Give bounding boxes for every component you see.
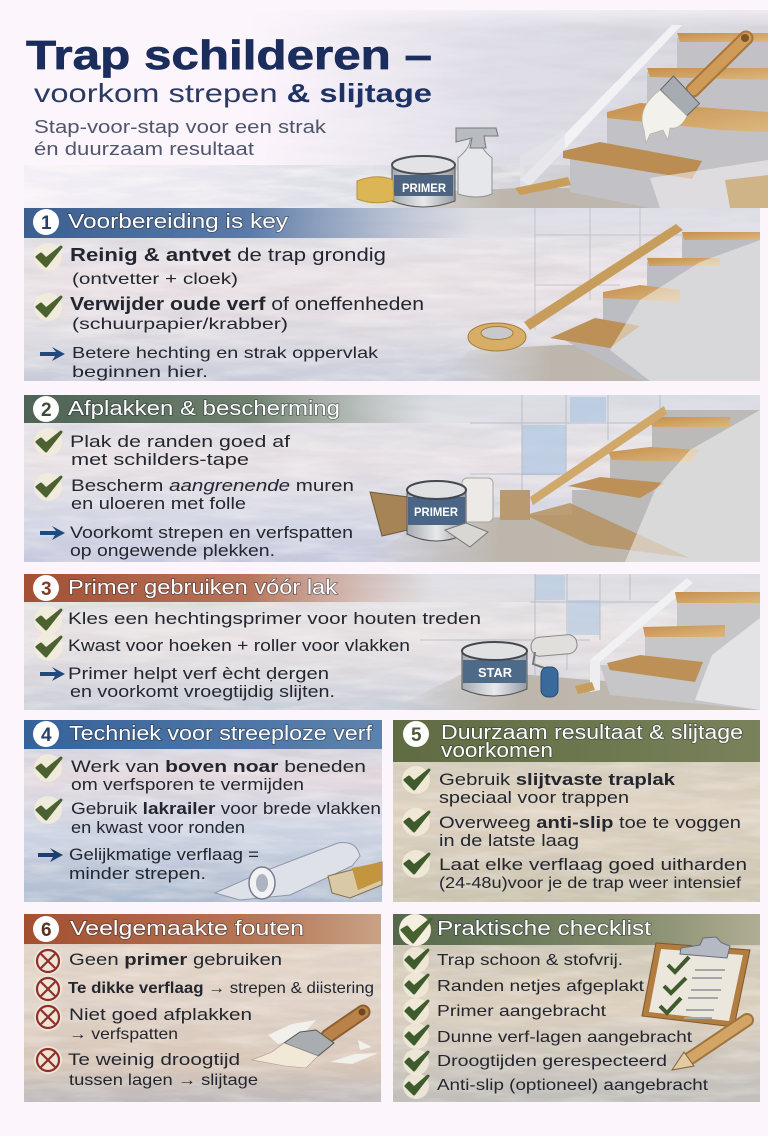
section header xyxy=(24,208,474,238)
arrow note: Voorkomt strepen en verfspatten xyxy=(70,523,353,542)
section header: Techniek voor streeploze verf xyxy=(69,723,373,745)
check item: bescherm: Bescherm aangrenende muren xyxy=(71,476,354,495)
illustration: stairs with foil xyxy=(390,574,760,710)
panel background xyxy=(393,720,760,902)
panel background xyxy=(24,395,760,562)
illustration: stairs with handrail xyxy=(360,25,768,208)
check item: reinig: (ontvetter + cloek) xyxy=(72,271,238,288)
arrow note xyxy=(38,845,259,883)
check item: uitharden: Laat elke verflaag goed uitharden xyxy=(439,855,747,874)
check item: verwijder xyxy=(34,293,424,333)
title: Trap schilderen – xyxy=(26,32,432,78)
check item: anti-slip: Anti-slip (optioneel) aangebracht xyxy=(437,1077,709,1094)
section header: Primer gebruiken vóór lak xyxy=(68,577,338,599)
check item: verwijder: (schuurpapier/krabber) xyxy=(72,316,288,333)
icon: star can: STAR xyxy=(478,665,513,680)
error item: geen primer xyxy=(34,947,282,975)
check item: primer: Kles een hechtingsprimer voor houten treden xyxy=(68,609,481,628)
check item: droogtijden: Droogtijden gerespecteerd xyxy=(437,1053,667,1070)
check item: primer xyxy=(34,606,481,634)
arrow note xyxy=(40,523,353,560)
panel background xyxy=(24,914,381,1102)
panel: step 5 Duurzaam xyxy=(393,720,760,902)
check item: reinig xyxy=(34,243,386,288)
check item: primer: Primer aangebracht xyxy=(437,1003,607,1020)
check item: anti-slip: in de latste laag xyxy=(439,831,579,850)
check item: anti-slip xyxy=(402,808,741,850)
arrow note xyxy=(40,664,335,701)
arrow note: beginnen hier. xyxy=(72,364,208,381)
check item: lakrailer: en kwast voor ronden xyxy=(71,818,245,837)
section header: 3 xyxy=(41,579,52,600)
intro text: Stap-voor-stap voor een strak xyxy=(34,117,327,137)
error item: afplakken: → verfspatten xyxy=(69,1026,178,1043)
arrow note: minder strepen. xyxy=(69,864,206,883)
section header: 5 xyxy=(411,725,422,746)
icon: star can xyxy=(462,642,527,696)
check item: plak: Plak de randen goed af xyxy=(70,432,290,451)
section header: 2 xyxy=(41,400,52,421)
check item: randen xyxy=(403,972,645,998)
intro text xyxy=(34,117,327,159)
panel: hero header xyxy=(24,0,768,208)
icon: paint brush xyxy=(642,34,749,143)
icon: spray bottle xyxy=(456,128,498,197)
icon: primer can: PRIMER xyxy=(402,181,446,195)
check item: slijtvaste traplak: Gebruik slijtvaste traplak xyxy=(439,770,676,789)
check item: uitharden: (24-48u)voor je de trap weer intensief xyxy=(439,875,742,892)
section header xyxy=(393,720,760,762)
error item: dikke verflaag xyxy=(34,975,374,1003)
section header xyxy=(393,914,760,946)
check item: verwijder: Verwijder oude verf of oneffenheden xyxy=(70,294,424,314)
check item: werk xyxy=(34,754,366,794)
icon: sponge xyxy=(357,177,394,203)
illustration: foil roll and wood blocks xyxy=(215,843,382,900)
arrow note: Primer helpt verf ècht ḍergen xyxy=(68,664,329,683)
icon: paint brush with splatter xyxy=(252,1008,378,1068)
check item: droogtijden xyxy=(403,1049,667,1075)
check item: bescherm xyxy=(34,473,354,513)
check item: uitharden xyxy=(402,850,747,892)
section header: Duurzaam resultaat & slijtage xyxy=(441,722,743,744)
arrow note: Betere hechting en strak oppervlak xyxy=(72,345,379,362)
section header: 4 xyxy=(41,725,52,746)
arrow note: Gelijkmatige verflaag = xyxy=(69,845,259,864)
section header xyxy=(24,574,434,602)
check item: kwast: Kwast voor hoeken + roller voor vlakken xyxy=(68,636,410,655)
error item: droogtijd xyxy=(34,1046,258,1089)
icon: primer can xyxy=(407,481,466,541)
intro text: én duurzaam resultaat xyxy=(34,139,254,159)
error item: afplakken xyxy=(34,1003,252,1043)
section header xyxy=(24,914,381,944)
check item: werk: om verfsporen te vermijden xyxy=(71,775,304,794)
icon: clipboard xyxy=(642,937,750,1027)
illustration: stairs with foil xyxy=(360,395,760,562)
error item: afplakken: Niet goed afplakken xyxy=(69,1005,252,1024)
check item: reinig: Reinig & antvet de trap grondig xyxy=(70,245,386,265)
check item: primer xyxy=(403,998,607,1024)
error item: dikke verflaag: Te dikke verflaag → strepen & diistering xyxy=(68,980,374,997)
section header: Veelgemaakte fouten xyxy=(70,918,304,940)
panel background xyxy=(24,720,382,902)
section header: Praktische checklist xyxy=(437,918,652,940)
arrow note: op ongewende plekken. xyxy=(70,541,275,560)
check item: dunne lagen: Dunne verf-lagen aangebracht xyxy=(437,1029,693,1046)
panel background xyxy=(24,574,760,710)
panel: praktische checklist xyxy=(393,914,760,1102)
panel: step 6 Veelgemaakte fouten xyxy=(24,914,381,1102)
check item: dunne lagen xyxy=(403,1023,693,1049)
panel: step 3 Primer xyxy=(24,574,760,710)
check item: anti-slip: Overweeg anti-slip toe te voggen xyxy=(439,813,741,832)
check item: lakrailer xyxy=(34,796,381,837)
icon: cardboard and block xyxy=(370,478,493,536)
panel background xyxy=(393,914,760,1102)
panel: step 2 Afplakken xyxy=(24,395,760,562)
subtitle: voorkom strepen & slijtage xyxy=(34,78,432,108)
check item: slijtvaste traplak: speciaal voor trappen xyxy=(439,788,629,807)
check item: lakrailer: Gebruik lakrailer voor brede vlakken xyxy=(71,799,381,818)
panel: step 1 Voorbereiding xyxy=(24,208,760,381)
check item: plak: met schilders-tape xyxy=(71,450,249,469)
icon: paint roller xyxy=(530,634,578,697)
icon: pencil xyxy=(672,1020,747,1070)
panel: step 4 Techniek xyxy=(24,720,382,902)
check item: randen: Randen netjes afgeplakt xyxy=(437,978,645,995)
icon: primer can: PRIMER xyxy=(414,505,458,519)
error item: droogtijd: Te weinig droogtijd xyxy=(68,1050,240,1069)
section header: Voorbereiding is key xyxy=(68,211,288,233)
section header xyxy=(24,395,434,423)
section header xyxy=(24,720,382,749)
check item: kwast xyxy=(34,633,410,661)
error item: geen primer: Geen primer gebruiken xyxy=(69,950,282,969)
check item: werk: Werk van boven noar beneden xyxy=(71,757,366,776)
title xyxy=(26,32,432,108)
illustration: stairs with tape xyxy=(440,208,760,381)
section header: voorkomen xyxy=(441,740,553,762)
panel background xyxy=(24,208,760,381)
error item: droogtijd: tussen lagen → slijtage xyxy=(69,1072,258,1089)
section header: Afplakken & bescherming xyxy=(68,398,340,420)
icon: primer can xyxy=(392,156,455,207)
icon: sanding block xyxy=(445,523,488,547)
arrow note: en voorkomt vroegtijdig slijten. xyxy=(70,682,335,701)
check item: trap schoon xyxy=(403,947,623,973)
check item: bescherm: en uloeren met folle xyxy=(71,494,246,513)
section header: 6 xyxy=(41,920,52,941)
check item: plak xyxy=(34,428,290,469)
check item: trap schoon: Trap schoon & stofvrij. xyxy=(437,952,623,969)
arrow note xyxy=(40,345,379,381)
check item: anti-slip xyxy=(403,1073,709,1099)
check item: slijtvaste traplak xyxy=(402,766,676,807)
section header: 1 xyxy=(41,213,52,234)
hero background wall xyxy=(24,0,768,208)
